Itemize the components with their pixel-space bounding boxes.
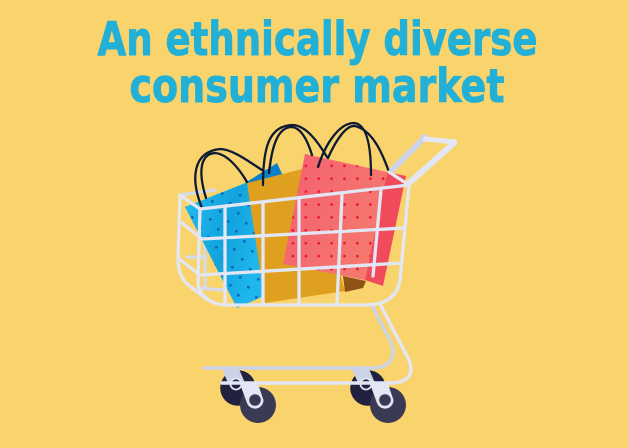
red bag: [283, 154, 406, 286]
bag handles: [195, 123, 389, 208]
title: consumer market: [130, 59, 504, 113]
rear cart leg: [204, 306, 393, 368]
front cart leg: [222, 306, 411, 383]
gold bag: [247, 167, 366, 303]
blue bag: [185, 163, 283, 308]
front wheels: [240, 384, 406, 423]
title: [98, 12, 538, 113]
title: An ethnically diverse: [98, 12, 538, 66]
cart front basket wires: [178, 172, 409, 305]
cart back wires and handle arm: [180, 137, 455, 290]
shopping cart illustration: [178, 123, 455, 423]
rear wheels: [220, 369, 386, 406]
cart handle: [409, 143, 454, 183]
